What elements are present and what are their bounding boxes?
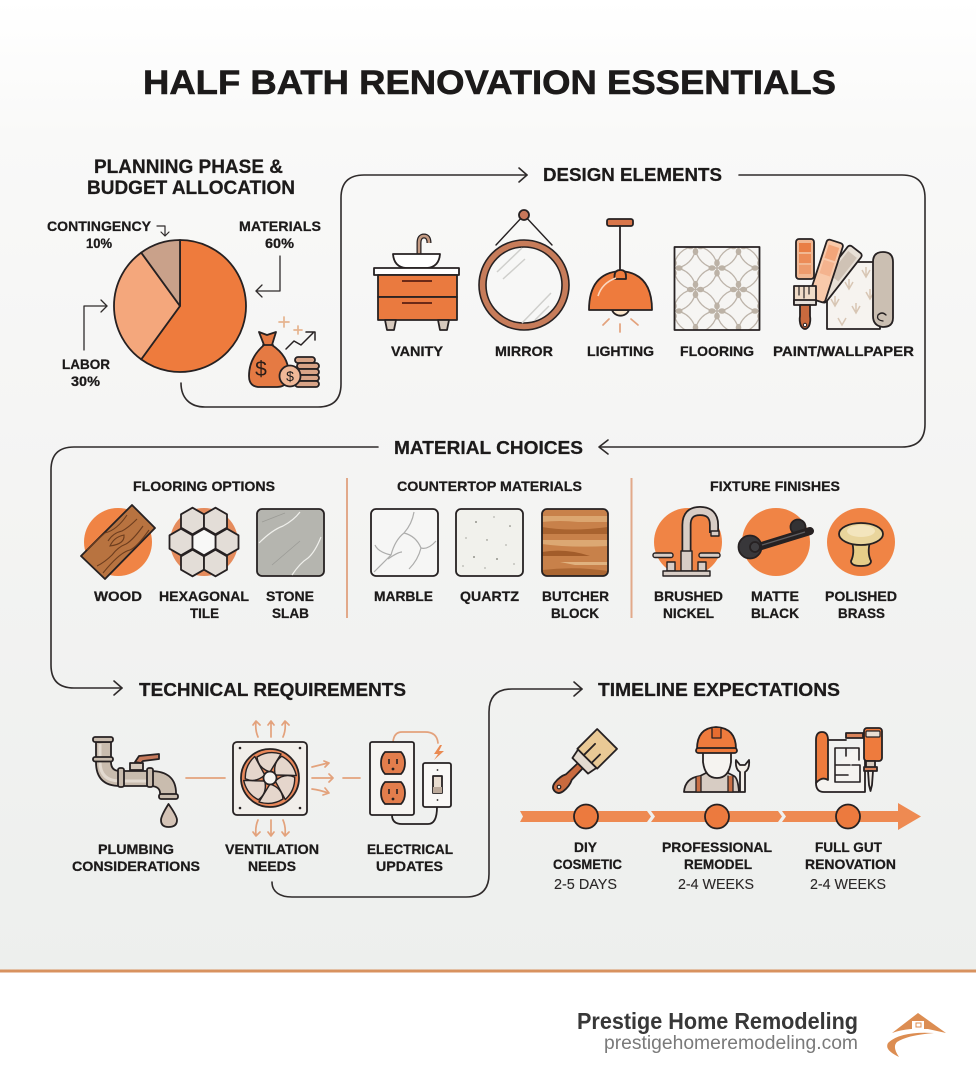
panel: material choices: [81, 437, 897, 621]
label: stone slab: [266, 588, 314, 621]
label: polished brass: POLISHED: [825, 588, 897, 604]
label: matte black: MATTE: [751, 588, 799, 604]
label: brushed nickel: [654, 588, 723, 621]
label: professional remodel: PROFESSIONAL: [662, 839, 772, 855]
timeline marker: DIY: [574, 804, 598, 828]
icon: paint swatches, brush and wallpaper: [794, 239, 893, 329]
icon: paint brush: [545, 729, 617, 801]
arrow: contingency: [157, 226, 169, 236]
label: contingency 10%: CONTINGENCY: [47, 218, 152, 234]
label: labor 30%: LABOR: [62, 356, 110, 372]
label: brushed nickel: BRUSHED: [654, 588, 723, 604]
icon: brushed nickel faucet: [653, 508, 722, 576]
icon: marble: [371, 509, 438, 576]
heading: material choices: MATERIAL CHOICES: [394, 437, 583, 458]
label: professional remodel: 2-4 WEEKS: [678, 877, 754, 893]
icon: electrical outlet and switch: [370, 732, 451, 824]
timeline arrow: [520, 803, 921, 830]
connector arrow: technical to timeline: [272, 682, 582, 897]
heading: planning: BUDGET ALLOCATION: [87, 178, 295, 199]
divider: countertop and fixtures: [630, 478, 632, 618]
connector arrow: planning to design: [181, 168, 527, 407]
label: marble: MARBLE: [374, 588, 433, 604]
subheading: countertop materials: COUNTERTOP MATERIALS: [397, 478, 582, 494]
icon: contractor with wrench: [684, 727, 749, 792]
label: contingency 10%: [47, 218, 152, 251]
icon: mirror: [479, 210, 569, 330]
subheading: flooring options: FLOORING OPTIONS: [133, 478, 275, 494]
label: brushed nickel: NICKEL: [663, 605, 714, 621]
heading: planning: PLANNING PHASE &: [94, 157, 283, 178]
label: stone slab: STONE: [266, 588, 314, 604]
label: butcher block: [542, 588, 609, 621]
timeline marker: full gut: [836, 804, 860, 828]
icon: polished brass knob: [827, 508, 895, 576]
footer rule: [0, 970, 976, 972]
label: contingency 10%: 10%: [86, 235, 113, 251]
heading: technical requirements: TECHNICAL REQUIREMENTS: [139, 679, 406, 700]
title: HALF BATH RENOVATION ESSENTIALS: [143, 64, 836, 102]
label: full gut renovation: FULL GUT: [815, 839, 882, 855]
label: professional remodel: [662, 839, 772, 893]
connector line: ventilation to electrical: [343, 777, 360, 779]
label: vanity: VANITY: [391, 343, 444, 359]
label: ventilation needs: [225, 841, 319, 874]
icon: quartz: [456, 509, 523, 576]
heading: planning: [87, 157, 295, 199]
connector line: plumbing to ventilation: [186, 777, 225, 779]
label: materials 60%: MATERIALS: [239, 218, 321, 234]
footer: [0, 970, 976, 1088]
label: full gut renovation: [805, 839, 896, 893]
icon: flooring tile: [674, 247, 760, 330]
label: full gut renovation: RENOVATION: [805, 856, 896, 872]
brand name: Prestige Home Remodeling: [577, 1008, 858, 1034]
label: labor 30%: [62, 356, 110, 389]
label: DIY cosmetic: [553, 839, 622, 893]
label: hexagonal tile: HEXAGONAL: [159, 588, 249, 604]
icon: money bag and coins: [249, 317, 319, 387]
label: matte black: [751, 588, 799, 621]
icon: wood plank: [81, 505, 155, 579]
icon: stone slab: [257, 509, 324, 576]
label: full gut renovation: 2-4 WEEKS: [810, 877, 886, 893]
icon: money bag and coins: $: [255, 358, 267, 381]
arrow: materials: [256, 256, 280, 297]
icon: vanity: [374, 236, 459, 330]
subheading: fixture finishes: FIXTURE FINISHES: [710, 478, 840, 494]
label: DIY cosmetic: 2-5 DAYS: [554, 877, 617, 893]
label: ventilation needs: VENTILATION: [225, 841, 319, 857]
icon: blueprint and jackhammer: [816, 728, 882, 792]
timeline marker: professional: [705, 804, 729, 828]
connector arrow: materials to technical: [51, 447, 378, 695]
label: materials 60%: 60%: [265, 235, 295, 251]
label: stone slab: SLAB: [272, 605, 309, 621]
label: butcher block: BUTCHER: [542, 588, 609, 604]
panel: planning phase and budget allocation: [47, 157, 321, 389]
icon: money bag and coins: $: [286, 368, 294, 384]
panel: design elements: [374, 164, 914, 359]
label: plumbing considerations: CONSIDERATIONS: [72, 858, 200, 874]
icon: plumbing pipe and drip: [93, 737, 178, 827]
label: quartz: QUARTZ: [460, 588, 519, 604]
icon: butcher block: [542, 509, 608, 576]
label: hexagonal tile: [159, 588, 249, 621]
icon: ventilation fan with airflow arrows: [233, 721, 333, 836]
label: mirror: MIRROR: [495, 343, 553, 359]
label: polished brass: [825, 588, 897, 621]
heading: timeline expectations: TIMELINE EXPECTATIONS: [598, 679, 840, 700]
icon: matte black towel bar: [738, 508, 810, 576]
panel: technical requirements: [72, 679, 453, 874]
label: professional remodel: REMODEL: [684, 856, 752, 872]
label: ventilation needs: NEEDS: [248, 858, 296, 874]
label: electrical updates: ELECTRICAL: [367, 841, 453, 857]
icon: pendant light: [589, 219, 652, 332]
label: electrical updates: [367, 841, 453, 874]
icon: house logo: [887, 1013, 946, 1057]
label: polished brass: BRASS: [838, 605, 885, 621]
brand url: prestigehomeremodeling.com: [604, 1033, 858, 1054]
arrow: labor: [84, 300, 107, 350]
label: paint/wallpaper: PAINT/WALLPAPER: [773, 343, 914, 359]
label: matte black: BLACK: [751, 605, 799, 621]
label: flooring: FLOORING: [680, 343, 754, 359]
label: materials 60%: [239, 218, 321, 251]
label: plumbing considerations: PLUMBING: [98, 841, 174, 857]
label: hexagonal tile: TILE: [190, 605, 219, 621]
label: lighting: LIGHTING: [587, 343, 654, 359]
label: DIY cosmetic: DIY: [574, 839, 598, 855]
label: DIY cosmetic: COSMETIC: [553, 856, 622, 872]
label: labor 30%: 30%: [71, 373, 101, 389]
label: wood: WOOD: [94, 588, 142, 604]
pie chart: budget allocation: [114, 240, 246, 372]
panel: timeline expectations: [520, 679, 921, 893]
icon: hexagonal tile: [170, 508, 238, 576]
divider: flooring and countertop: [346, 478, 348, 618]
heading: design elements: DESIGN ELEMENTS: [543, 164, 722, 185]
label: electrical updates: UPDATES: [376, 858, 443, 874]
label: butcher block: BLOCK: [551, 605, 599, 621]
connector arrow: design to materials: [599, 175, 925, 454]
label: plumbing considerations: [72, 841, 200, 874]
